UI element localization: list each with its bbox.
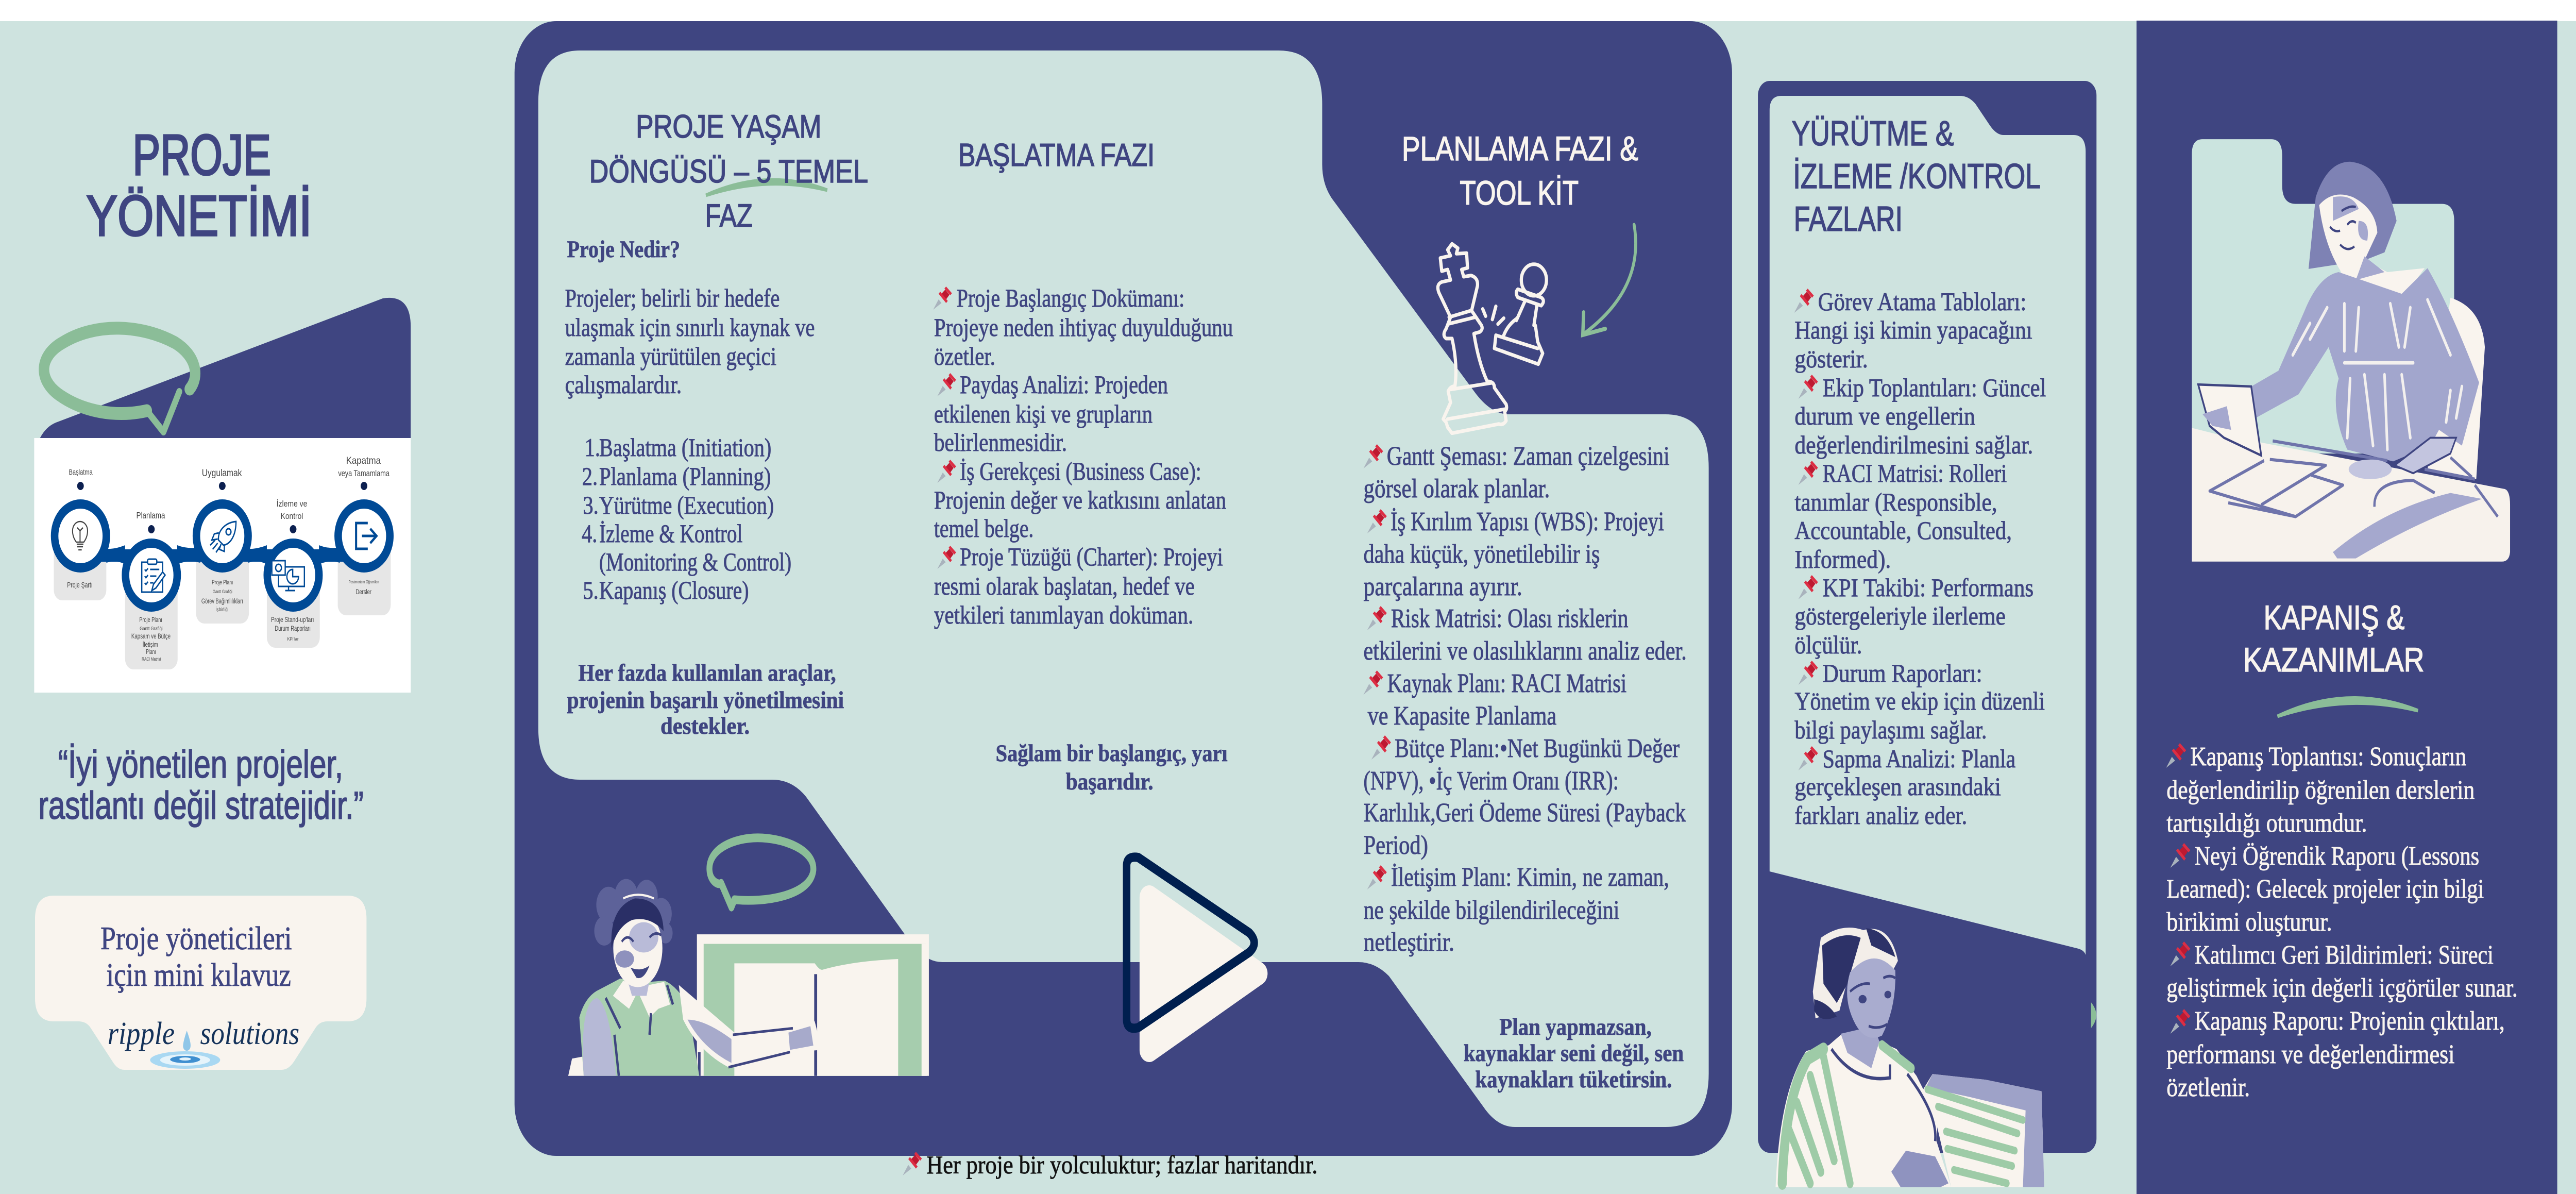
text block: five phases list [582, 433, 791, 604]
phase labels [69, 455, 389, 521]
text block: five phases list: 2. [582, 462, 598, 491]
dress pleats [2293, 300, 2462, 449]
card labels: Durum Raporları [275, 624, 311, 632]
heading: closing and gains: KAPANIŞ & [2264, 599, 2404, 636]
card labels: RACI Matrisi [142, 657, 161, 662]
quote: “İyi yönetilen projeler, [58, 742, 343, 786]
person [568, 879, 822, 1076]
text block: five phases list: 1. [585, 433, 600, 462]
item: work breakdown structure [1363, 507, 1664, 601]
item: work breakdown structure: parçalarına ayırır. [1363, 572, 1522, 601]
card labels: Proje Planı [212, 579, 233, 586]
heading: planning phase: PLANLAMA FAZI & [1402, 130, 1638, 167]
item: project charter [934, 542, 1223, 629]
item: team meetings: Ekip Toplantıları: Güncel [1823, 373, 2046, 402]
card labels: Planı [146, 648, 156, 655]
desk sketches [2210, 441, 2498, 517]
mint backdrop [2192, 139, 2454, 453]
item: closing meeting: değerlendirilip öğrenilen derslerin [2166, 776, 2475, 805]
phase labels: Kapatma [346, 455, 381, 466]
item: RACI matrix: RACI Matrisi: Rolleri [1823, 459, 2007, 487]
item: project charter: yetkileri tanımlayan doküman. [934, 600, 1193, 629]
item: work breakdown structure: İş Kırılım Yapısı (WBS): Projeyi [1391, 507, 1664, 536]
icon: small green marker [2091, 1002, 2096, 1028]
item: lessons learned: Neyi Öğrendik Raporu (Lessons [2194, 842, 2479, 871]
text block: what is a project [565, 236, 815, 399]
brush underline [2278, 698, 2418, 716]
item: gantt chart: Gantt Şeması: Zaman çizelgesini [1387, 442, 1670, 471]
item: closing meeting: Kapanış Toplantısı: Sonuçların [2190, 742, 2466, 771]
icon: monitor with chart [272, 561, 304, 591]
green cardigan [1782, 1045, 1911, 1183]
item: stakeholder analysis: Paydaş Analizi: Projeden [960, 370, 1168, 399]
item: task assignment tables [1794, 287, 2032, 373]
item: RACI matrix: Informed). [1794, 545, 1891, 574]
item: closing report: özetlenir. [2166, 1073, 2250, 1102]
item: status reports: Durum Raporları: [1823, 659, 1982, 687]
callout: tools support [567, 660, 844, 739]
item: participant feedback: Katılımcı Geri Bildirimleri: Süreci [2194, 940, 2494, 970]
title: YÖNETİMİ [87, 184, 312, 248]
callout: plan or be consumed: kaynakları tüketirsin. [1475, 1066, 1672, 1093]
item: KPI tracking [1794, 573, 2033, 659]
panel interior mint shape [538, 51, 1709, 1127]
item: communication plan: netleştirir. [1363, 928, 1454, 957]
card labels: Gantt Grafiği [140, 626, 163, 631]
item: communication plan: ne şekilde bilgilendirileceğini [1363, 896, 1619, 925]
icon: rocket [210, 522, 236, 552]
item: budget plan [1363, 734, 1686, 860]
neck and collar [1841, 1026, 1879, 1068]
logo: ripple solutions: solutions [200, 1016, 299, 1051]
panel: closing and gains [2137, 21, 2557, 1194]
footer note: Her proje bir yolculuktur; fazlar haritandır. [926, 1150, 1317, 1179]
item: work breakdown structure: daha küçük, yönetilebilir iş [1363, 540, 1600, 569]
card labels: Proje Stand-up'ları [271, 615, 314, 624]
text block: planning tool kit [1363, 442, 1687, 957]
callout: tools support: Her fazda kullanılan araçlar, [579, 660, 836, 686]
item: budget plan: (NPV), •İç Verim Oranı (IRR): [1363, 766, 1619, 796]
desk [2192, 428, 2510, 562]
logo: ripple solutions [108, 1016, 299, 1069]
callout: tools support: destekler. [660, 713, 750, 739]
heading: execution and control: YÜRÜTME & [1792, 114, 1954, 153]
item: lessons learned: birikimi oluşturur. [2166, 907, 2332, 937]
illustration: teacher pointing at book [568, 838, 929, 1076]
panel: left cover column [34, 124, 411, 1070]
heading: project lifecycle: FAZ [705, 198, 753, 234]
hand [1891, 1151, 1948, 1187]
item: risk matrix: Risk Matrisi: Olası risklerin [1391, 604, 1628, 633]
card labels: Proje Planı [139, 616, 162, 624]
heading: initiation phase: BAŞLATMA FAZI [958, 137, 1155, 173]
item: communication plan [1363, 863, 1669, 957]
item: closing report: performansı ve değerlendirmesi [2166, 1040, 2454, 1069]
text block: initiation items [933, 283, 1233, 629]
card labels: Proje Şartı [67, 581, 93, 589]
heading: project lifecycle: PROJE YAŞAM [636, 109, 821, 145]
item: KPI tracking: göstergeleriyle ilerleme [1794, 601, 2006, 630]
card labels: Kapsam ve Bütçe [131, 632, 171, 640]
item: closing report: Kapanış Raporu: Projenin çıktıları, [2194, 1006, 2505, 1036]
heading: project lifecycle: DÖNGÜSÜ – 5 TEMEL [589, 154, 868, 190]
title [87, 124, 312, 248]
callout: plan or be consumed [1464, 1014, 1684, 1093]
text block: what is a project: zamanla yürütülen geçici [565, 342, 776, 371]
card labels: Postmortem Öğrenilen [349, 579, 379, 584]
timeline dots [77, 482, 367, 533]
item: lessons learned [2166, 842, 2484, 937]
callout: mini guide card with logo: için mini kılavuz [106, 956, 291, 993]
item: gantt chart: görsel olarak planlar. [1363, 474, 1550, 503]
callout: plan or be consumed: kaynaklar seni değil, sen [1464, 1040, 1684, 1067]
item: RACI matrix [1794, 459, 2012, 574]
icon: green speech bubble [44, 328, 195, 432]
item: variance analysis: farkları analiz eder. [1794, 801, 1967, 830]
illustration: woman at desk with papers [2192, 139, 2510, 562]
book board [697, 934, 929, 1076]
phase labels: Başlatma [69, 468, 93, 476]
card labels: Gantt Grafiği [213, 589, 232, 594]
item: KPI tracking: KPI Takibi: Performans [1823, 573, 2033, 602]
item: stakeholder analysis: belirlenmesidir. [934, 428, 1067, 457]
item: business case: İş Gerekçesi (Business Case): [960, 457, 1201, 485]
icon: light bulb [73, 522, 88, 550]
text block: what is a project: Projeler; belirli bir hedefe [565, 283, 779, 312]
hair [2309, 162, 2397, 269]
book [1923, 1074, 2044, 1187]
card labels: KPI'lar [287, 636, 299, 642]
heading: closing and gains: KAZANIMLAR [2243, 641, 2424, 679]
chart: project lifecycle timeline [34, 438, 411, 693]
heading: execution and control: FAZLARI [1794, 200, 1903, 239]
item: KPI tracking: ölçülür. [1794, 630, 1862, 659]
panel: execution and monitoring [1758, 81, 2096, 1187]
logo: ripple solutions: ripple [108, 1016, 175, 1051]
callout: solid start: Sağlam bir başlangıç, yarı [996, 740, 1228, 767]
resting hand [2395, 438, 2456, 473]
card labels [67, 579, 379, 662]
text block: execution tools [1794, 287, 2046, 830]
phase labels: Uygulamak [202, 467, 242, 478]
text block: five phases list: Yürütme (Execution) [599, 491, 774, 519]
card labels: İletişim [143, 641, 158, 648]
item: project charter: Proje Tüzüğü (Charter): Projeyi [960, 542, 1223, 571]
item: closing meeting: tartışıldığı oturumdur. [2166, 809, 2367, 838]
item: variance analysis: gerçekleşen arasındaki [1794, 772, 2001, 801]
callout: solid start [996, 740, 1228, 795]
item: RACI matrix: Accountable, Consulted, [1794, 516, 2012, 545]
body [1775, 1034, 1951, 1187]
item: gantt chart [1363, 442, 1670, 503]
card labels: Görev Bağımlılıkları [201, 597, 243, 605]
item: variance analysis: Sapma Analizi: Planla [1823, 744, 2015, 773]
text block: five phases list: (Monitoring & Control) [599, 547, 791, 576]
heading: execution and control: İZLEME /KONTROL [1793, 157, 2041, 196]
item: status reports: bilgi paylaşımı sağlar. [1794, 715, 1987, 744]
callout: tools support: projenin başarılı yönetilmesini [567, 687, 844, 714]
phase labels: İzleme ve [277, 499, 307, 509]
text block: five phases list: Başlatma (Initiation) [599, 433, 771, 462]
icon: play triangles [1127, 857, 1258, 1050]
quote: rastlantı değil stratejidir.” [38, 783, 364, 827]
dress [2251, 268, 2479, 461]
item: team meetings: değerlendirilmesini sağlar. [1794, 430, 2033, 459]
heading: planning phase [1402, 130, 1638, 212]
text block: five phases list: 4. [582, 519, 597, 548]
title: PROJE [132, 124, 271, 187]
phase labels: Kontrol [281, 512, 303, 521]
text block: five phases list: 3. [583, 491, 599, 519]
text block: five phases list: Kapanış (Closure) [599, 576, 749, 604]
item: task assignment tables: Görev Atama Tabloları: [1818, 287, 2026, 316]
arrow: green curved arrow [1583, 225, 1636, 335]
heading: planning phase: TOOL KİT [1460, 174, 1579, 212]
item: task assignment tables: gösterir. [1794, 344, 1868, 373]
item: team meetings [1794, 373, 2046, 459]
item: risk matrix [1363, 604, 1687, 666]
item: closing report [2166, 1006, 2505, 1102]
callout: solid start: başarıdır. [1066, 768, 1154, 795]
item: project start document [933, 283, 1233, 371]
panel: main lifecycle panel [515, 21, 1732, 1156]
item: budget plan: Period) [1363, 831, 1428, 860]
item: stakeholder analysis [934, 370, 1168, 457]
item: business case: temel belge. [934, 514, 1033, 543]
face [1847, 958, 1895, 1038]
item: risk matrix: etkilerini ve olasılıklarını analiz eder. [1363, 636, 1687, 666]
item: team meetings: durum ve engellerin [1794, 401, 1975, 430]
icon: chess king and pawn [1438, 244, 1547, 433]
item: resource plan [1363, 669, 1626, 731]
dark wedge shape behind lifecycle diagram [40, 298, 411, 438]
item: participant feedback: geliştirmek için değerli içgörüler sunar. [2166, 973, 2518, 1003]
text block: what is a project: ulaşmak için sınırlı kaynak ve [565, 313, 815, 342]
heading: project lifecycle [589, 109, 868, 234]
item: project start document: özetler. [934, 342, 995, 371]
hair [1813, 928, 1898, 1018]
text block: five phases list: İzleme & Kontrol [599, 519, 742, 548]
item: status reports [1794, 659, 2045, 744]
item: stakeholder analysis: etkilenen kişi ve grupların [934, 399, 1153, 428]
text block: what is a project: Proje Nedir? [567, 236, 680, 263]
item: lessons learned: Learned): Gelecek projeler için bilgi [2166, 875, 2484, 904]
panel interior mint shape [1770, 96, 2086, 955]
item: task assignment tables: Hangi işi kimin yapacağını [1794, 315, 2032, 344]
illustration: woman reading document [1775, 928, 2044, 1187]
timeline ribbon and circles [55, 504, 390, 607]
item: variance analysis [1794, 744, 2015, 830]
quote [38, 742, 364, 827]
text block: what is a project: çalışmalardır. [565, 370, 682, 399]
text block: five phases list: Planlama (Planning) [599, 462, 771, 491]
card labels: Dersler [355, 587, 372, 596]
text block: five phases list: 5. [583, 576, 599, 604]
item: communication plan: İletişim Planı: Kimin, ne zaman, [1391, 863, 1669, 892]
item: resource plan: ve Kapasite Planlama [1368, 701, 1556, 731]
phase labels: Planlama [137, 511, 165, 520]
icon: clipboard [142, 559, 165, 592]
callout: plan or be consumed: Plan yapmazsan, [1499, 1014, 1652, 1040]
item: business case [934, 457, 1226, 543]
item: business case: Projenin değer ve katkısını anlatan [934, 485, 1226, 514]
item: budget plan: Karlılık,Geri Ödeme Süresi (Payback [1363, 798, 1686, 828]
item: project charter: resmi olarak başlatan, hedef ve [934, 571, 1195, 600]
face and neck [2319, 195, 2425, 300]
timeline cards [54, 536, 391, 669]
item: participant feedback [2166, 940, 2518, 1003]
callout: mini guide card with logo: Proje yöneticileri [100, 920, 292, 956]
text block: closing tools [2166, 742, 2518, 1102]
card labels: İşbirliği [215, 607, 229, 612]
icon: exit arrow [356, 523, 377, 549]
chair [2428, 298, 2485, 479]
phase labels: veya Tamamlama [338, 469, 389, 478]
item: closing meeting [2166, 742, 2475, 838]
heading: closing and gains [2243, 599, 2424, 679]
item: status reports: Yönetim ve ekip için düzenli [1794, 686, 2045, 715]
item: RACI matrix: tanımlar (Responsible, [1794, 487, 1997, 516]
heading: execution and control [1792, 114, 2041, 239]
item: resource plan: Kaynak Planı: RACI Matrisi [1387, 669, 1626, 698]
speech bubble [709, 838, 814, 907]
callout: mini guide card with logo [35, 896, 366, 1070]
paper and hand [2198, 384, 2261, 456]
item: project start document: Projeye neden ihtiyaç duyulduğunu [934, 313, 1233, 342]
item: budget plan: Bütçe Planı:•Net Bugünkü Değer [1395, 734, 1680, 763]
item: project start document: Proje Başlangıç Dokümanı: [957, 283, 1184, 312]
